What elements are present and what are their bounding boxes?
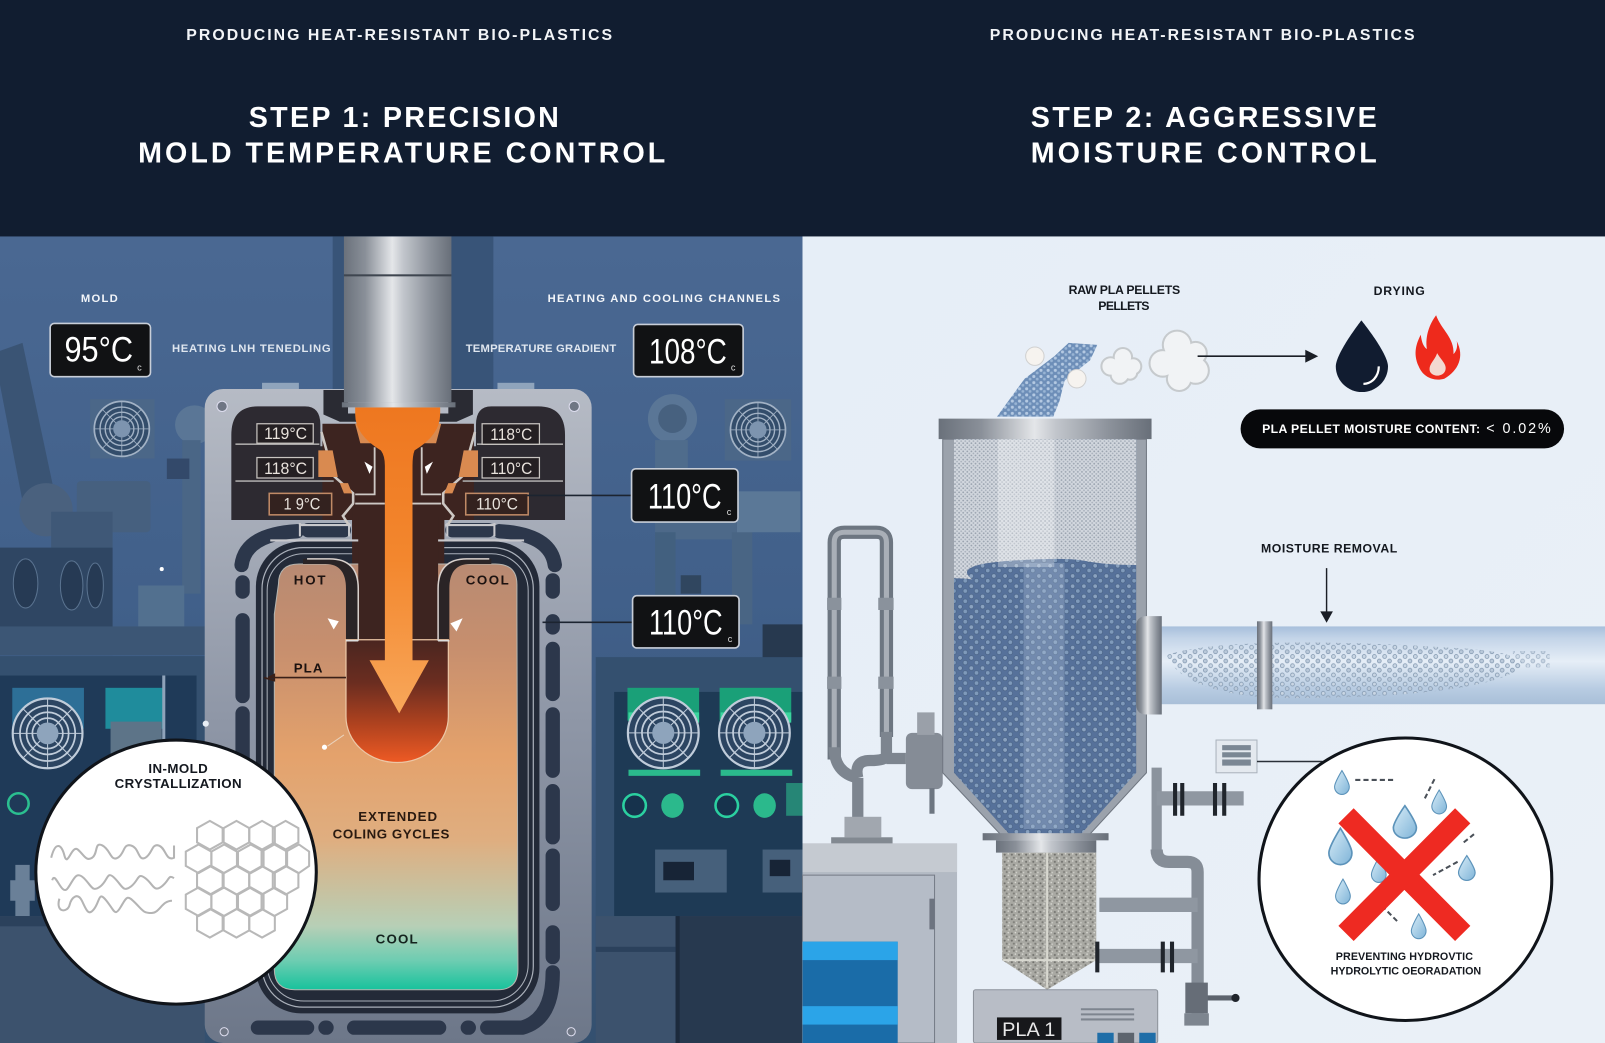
readout: 108C: c bbox=[731, 363, 736, 373]
title: step 2: STEP 2: AGGRESSIVE bbox=[1031, 102, 1377, 134]
small sprue strut bbox=[162, 676, 165, 742]
temperature readouts on mold: 119°C bbox=[264, 425, 307, 443]
readout: 110C upper: 110°C bbox=[648, 478, 722, 517]
header band bbox=[0, 0, 1605, 236]
connector line to readout bbox=[527, 495, 633, 622]
control box bbox=[973, 990, 1158, 1043]
pipework: right bbox=[1097, 768, 1244, 1026]
temperature readouts on mold bbox=[257, 424, 539, 515]
PLA leader bbox=[264, 675, 346, 681]
title: step 1: MOLD TEMPERATURE CONTROL bbox=[138, 138, 665, 170]
panel: moisture control bbox=[802, 236, 1605, 1043]
moisture content pill: < 0.02% bbox=[1486, 421, 1551, 437]
title: step 1 bbox=[138, 102, 665, 170]
kicker: left: PRODUCING HEAT-RESISTANT BIO-PLASTICS bbox=[186, 27, 612, 44]
temperature readouts on mold: 1 9°C bbox=[284, 496, 321, 514]
extended cooling text bbox=[333, 809, 449, 841]
icon: flame bbox=[1416, 315, 1460, 380]
icon: water drop bbox=[1336, 320, 1388, 392]
steam clouds bbox=[1100, 330, 1210, 392]
panel: mold temperature control bbox=[0, 236, 803, 1043]
readout: 110C lower: 110°C bbox=[649, 604, 723, 643]
moisture content pill: PLA PELLET MOISTURE CONTENT: bbox=[1262, 422, 1480, 436]
droplet behind cross bbox=[1371, 858, 1386, 882]
callout: in-mold crystallization bbox=[36, 721, 316, 1004]
background machinery: upper right bbox=[648, 394, 802, 660]
PLA chamber: PLA bbox=[294, 660, 323, 675]
readout: 110C lower bbox=[633, 596, 739, 648]
upper dark blocks bbox=[231, 406, 565, 520]
temperature readouts on mold: 110°C bbox=[476, 496, 518, 514]
readout: 108C: 108°C bbox=[649, 332, 727, 371]
center connector bbox=[352, 502, 444, 655]
segmented cooling channel bbox=[242, 530, 555, 1028]
small flow arrows bbox=[328, 462, 463, 632]
cool label: COOL bbox=[376, 932, 418, 947]
readout: 110C lower: c bbox=[728, 634, 733, 644]
copper inserts bbox=[318, 424, 478, 493]
callout caption: PREVENTING HYDROVTIC bbox=[1336, 951, 1473, 963]
molten PLA flow bbox=[355, 407, 440, 713]
extended cooling text: EXTENDED bbox=[358, 809, 437, 824]
callout: preventing hydrolytic degradation bbox=[1259, 738, 1552, 1020]
divider lines bbox=[235, 444, 563, 481]
nozzle bbox=[342, 236, 456, 407]
cabinet bbox=[802, 843, 957, 1043]
kicker: right: PRODUCING HEAT-RESISTANT BIO-PLASTICS bbox=[990, 27, 1415, 44]
callout heading: CRYSTALLIZATION bbox=[115, 776, 242, 791]
temperature readouts on mold: 118°C bbox=[490, 426, 532, 444]
control panel: lower right bbox=[596, 657, 802, 1043]
label: heating channels: HEATING LNH TENEDLING bbox=[172, 343, 331, 355]
label: moisture removal: MOISTURE REMOVAL bbox=[1261, 542, 1398, 556]
pedestal bbox=[831, 817, 893, 844]
arrow: to drying bbox=[1198, 351, 1316, 361]
readout: 95C: 95°C bbox=[64, 330, 133, 369]
amorphous chains bbox=[51, 845, 174, 913]
label: raw pellets: RAW PLA PELLETS bbox=[1069, 283, 1180, 297]
small vent icon bbox=[1216, 740, 1257, 773]
title: step 2 bbox=[1031, 102, 1377, 170]
pipework: left loop bbox=[827, 532, 906, 819]
extended cooling text: COLING GYCLES bbox=[333, 826, 449, 841]
drying tube bbox=[1136, 616, 1605, 714]
readout: 95C bbox=[50, 323, 150, 377]
callout heading bbox=[115, 761, 242, 791]
readout: 110C upper bbox=[632, 469, 738, 522]
callout caption: HYDROLYTIC OEORADATION bbox=[1331, 965, 1481, 977]
label: mold: MOLD bbox=[81, 293, 118, 305]
red cross bbox=[1346, 816, 1463, 933]
control box: PLA 1 bbox=[1002, 1019, 1055, 1041]
crystalline honeycomb bbox=[186, 821, 309, 938]
leader to callout bbox=[1257, 761, 1322, 763]
arrow: moisture removal bbox=[1321, 568, 1332, 621]
moisture content pill bbox=[1241, 409, 1564, 448]
callout heading: IN-MOLD bbox=[148, 761, 208, 776]
chamber labels: HOT bbox=[294, 572, 326, 587]
label: heating and cooling channels: HEATING AND COOLING CHANNELS bbox=[548, 293, 780, 305]
control panel: lower left bbox=[0, 656, 205, 1043]
dashed connectors bbox=[1355, 778, 1474, 921]
background machinery: upper left bbox=[0, 236, 493, 655]
PLA chamber: COOL bbox=[466, 572, 509, 587]
label: raw pellets bbox=[1069, 283, 1180, 313]
pump bbox=[906, 712, 943, 814]
hopper bbox=[939, 419, 1152, 990]
temperature readouts on mold: 110°C bbox=[490, 460, 532, 478]
label: drying: DRYING bbox=[1374, 284, 1425, 298]
readout: 108C bbox=[634, 324, 743, 377]
droplets bbox=[1329, 771, 1475, 939]
callout caption bbox=[1331, 951, 1481, 977]
readout: 110C upper: c bbox=[727, 507, 732, 517]
mold plate bbox=[205, 383, 592, 1043]
temperature readouts on mold: 118°C bbox=[264, 460, 307, 478]
pellet stream bbox=[997, 343, 1097, 417]
concentric channels bbox=[256, 541, 539, 1013]
upper brown core bbox=[322, 424, 474, 655]
readout: 95C: c bbox=[137, 363, 142, 373]
label: raw pellets: PELLETS bbox=[1098, 299, 1149, 313]
title: step 2: MOISTURE CONTROL bbox=[1031, 138, 1377, 170]
label: temperature gradient: TEMPERATURE GRADIENT bbox=[466, 343, 616, 355]
nozzle socket bbox=[323, 390, 473, 422]
PLA chamber bbox=[264, 462, 518, 990]
title: step 1: STEP 1: PRECISION bbox=[249, 102, 559, 134]
